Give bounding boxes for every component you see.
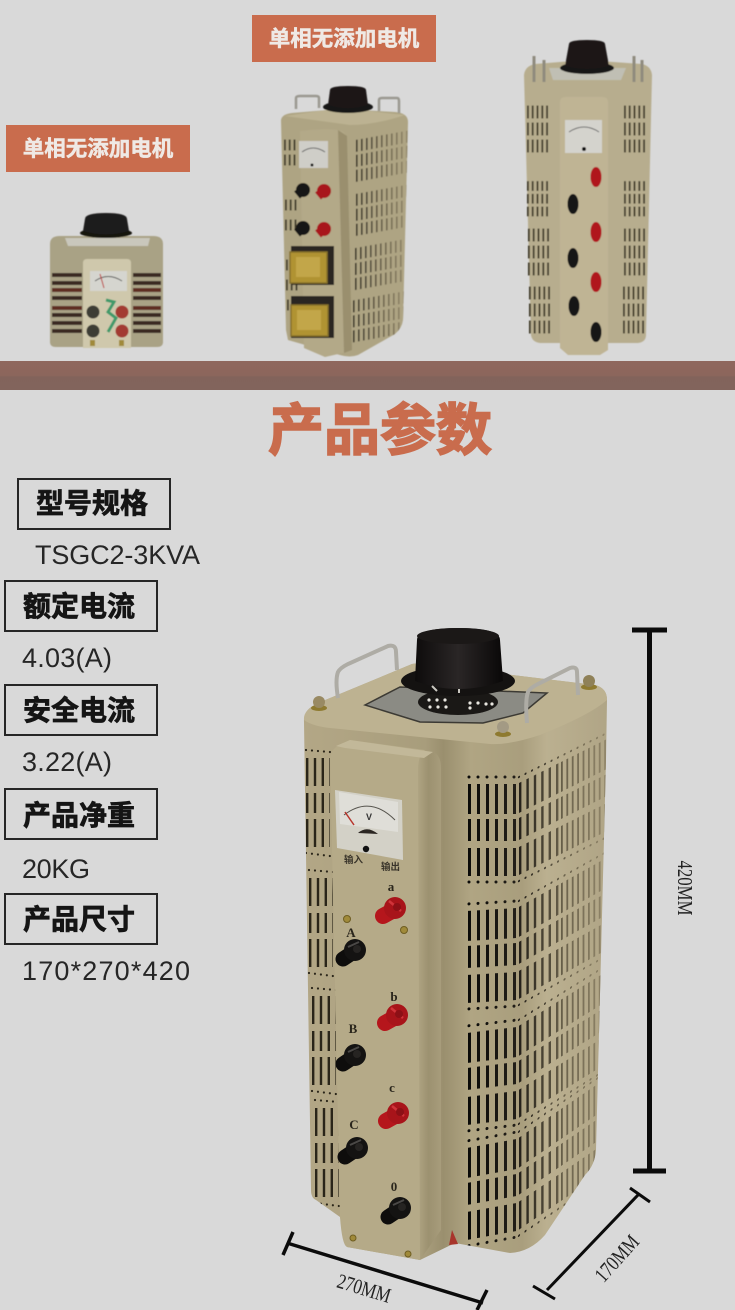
banner: centre label: 单相无添加电机 bbox=[269, 27, 420, 51]
terminal letters: C bbox=[349, 1117, 359, 1132]
spec: net weight: 产品净重 bbox=[23, 800, 135, 831]
handle: right bbox=[526, 668, 578, 723]
spec: model bbox=[18, 479, 200, 570]
panel captions: 输出 bbox=[381, 861, 400, 873]
spec: rated current: 额定电流 bbox=[23, 591, 135, 622]
spec: dimensions: 170*270*420 bbox=[22, 956, 190, 986]
voltmeter: V bbox=[366, 812, 372, 822]
divider band bbox=[0, 361, 735, 390]
product photo: three phase regulator bbox=[524, 40, 652, 355]
terminal letters bbox=[346, 879, 398, 1194]
spec: dimensions bbox=[5, 894, 190, 986]
spec: rated current bbox=[5, 581, 157, 673]
spec: net weight bbox=[5, 789, 157, 884]
product lineup photos bbox=[50, 40, 652, 357]
terminal letters: c bbox=[389, 1080, 395, 1095]
dimension: width 270MM bbox=[283, 1232, 487, 1310]
terminal letters: A bbox=[346, 925, 356, 940]
product photo: small single phase regulator bbox=[50, 213, 163, 348]
ventilation slots: left face bbox=[306, 750, 339, 1206]
warning sticker bbox=[449, 1230, 458, 1245]
dial plate bbox=[365, 687, 547, 723]
spec: safe current: 3.22(A) bbox=[22, 747, 112, 777]
terminal letters: 0 bbox=[391, 1179, 397, 1194]
spec: safe current: 安全电流 bbox=[23, 695, 135, 726]
dimension: height 420MM bbox=[632, 630, 696, 1171]
product photo: regulator with two transformers bbox=[281, 86, 408, 357]
bolts bbox=[311, 675, 597, 737]
spec: safe current bbox=[5, 685, 157, 777]
dimension: width 270MM: 270MM bbox=[334, 1270, 394, 1308]
panel captions: 输入 bbox=[344, 854, 364, 866]
voltmeter bbox=[335, 790, 403, 860]
spec: rated current: 4.03(A) bbox=[22, 643, 112, 673]
spec: model: 型号规格 bbox=[36, 488, 148, 519]
terminals bbox=[343, 897, 411, 1219]
terminal letters: a bbox=[388, 879, 395, 894]
title: 产品参数 bbox=[268, 399, 492, 462]
control knob bbox=[401, 628, 515, 715]
dimension: depth 170MM bbox=[533, 1188, 650, 1299]
panel captions bbox=[344, 854, 400, 873]
spec: net weight: 20KG bbox=[22, 854, 90, 884]
dimension: height 420MM: 420MM bbox=[672, 860, 696, 916]
spec: model: TSGC2-3KVA bbox=[35, 540, 200, 570]
terminal letters: b bbox=[390, 989, 398, 1004]
terminal letters: B bbox=[349, 1021, 358, 1036]
banner: left label: 单相无添加电机 bbox=[23, 137, 174, 161]
banner: centre label bbox=[252, 15, 436, 62]
handle: left bbox=[336, 646, 397, 698]
ventilation slots: right face bbox=[468, 734, 606, 1246]
banner: left label bbox=[6, 125, 190, 172]
front panel bbox=[330, 740, 441, 1260]
top face bbox=[304, 663, 607, 744]
body bbox=[304, 663, 607, 1260]
small screws bbox=[344, 916, 411, 1257]
product photo: large three phase regulator bbox=[304, 628, 607, 1260]
dimension: depth 170MM: 170MM bbox=[590, 1231, 645, 1287]
spec: dimensions: 产品尺寸 bbox=[23, 904, 135, 935]
